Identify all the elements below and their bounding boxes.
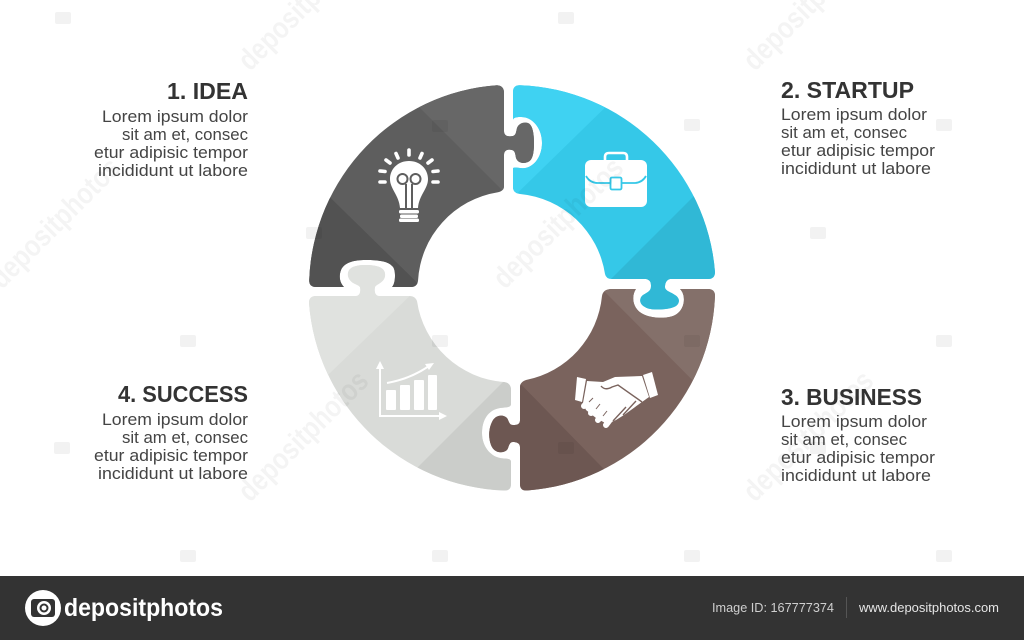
panel: puzzle piece 4 success: [309, 265, 511, 490]
text block: 4. success: incididunt ut labore: [98, 465, 248, 483]
text block: 3. business: etur adipisic tempor: [781, 449, 936, 467]
watermark text: depositphotos: [487, 151, 630, 295]
icon: growth chart: [376, 361, 447, 420]
text block: 3. business: [781, 384, 936, 485]
watermark text: [0, 0, 880, 508]
watermark text: depositphotos: [232, 364, 375, 508]
text block: 1. idea: sit am et, consec: [122, 126, 248, 144]
text block: 3. business: incididunt ut labore: [781, 467, 931, 485]
panel: puzzle piece 2 startup: [513, 85, 715, 310]
text block: 2. startup: etur adipisic tempor: [781, 142, 936, 160]
text block: 1. idea: etur adipisic tempor: [94, 144, 249, 162]
text block: 3. business: Lorem ipsum dolor: [781, 413, 928, 431]
text block: 3. business: 3. BUSINESS: [781, 384, 922, 410]
footer logo: [25, 590, 223, 626]
panel: puzzle piece 3 business: [489, 289, 715, 490]
image id: Image ID: 167777374: [712, 600, 834, 615]
panel: puzzle piece 1 idea: [309, 85, 534, 287]
text block: 1. idea: 1. IDEA: [167, 78, 248, 104]
text block: 4. success: etur adipisic tempor: [94, 447, 249, 465]
text block: 1. idea: incididunt ut labore: [98, 162, 248, 180]
watermark camera marks: [54, 12, 952, 562]
text block: 3. business: sit am et, consec: [781, 431, 907, 449]
icon: briefcase: [585, 153, 647, 207]
text block: 2. startup: [781, 77, 936, 178]
text block: 1. idea: Lorem ipsum dolor: [102, 108, 249, 126]
text block: 4. success: Lorem ipsum dolor: [102, 411, 249, 429]
text block: 2. startup: Lorem ipsum dolor: [781, 106, 928, 124]
text block: 2. startup: 2. STARTUP: [781, 77, 914, 103]
footer logo: depositphotos: [64, 594, 223, 622]
text block: 2. startup: incididunt ut labore: [781, 160, 931, 178]
text block: 4. success: [94, 381, 249, 483]
text block: 4. success: 4. SUCCESS: [118, 381, 248, 407]
text block: 4. success: sit am et, consec: [122, 429, 248, 447]
text block: 2. startup: sit am et, consec: [781, 124, 907, 142]
text block: 1. idea: [94, 78, 249, 180]
icon: handshake: [575, 372, 658, 425]
footer bar: [0, 576, 1024, 640]
watermark text: depositphotos: [737, 364, 880, 508]
website: www.depositphotos.com: [858, 600, 999, 615]
icon: light bulb: [380, 150, 438, 222]
